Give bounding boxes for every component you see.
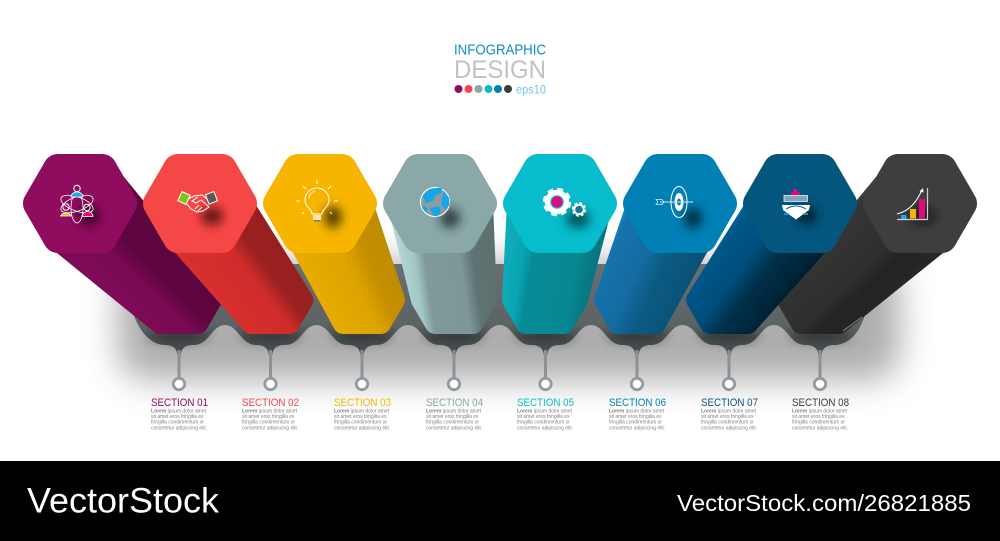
section 1 text: Lorem ipsum dolor amet [151, 408, 206, 414]
section 8 text: SECTION 08 [792, 397, 849, 409]
footer brand: VectorStock [27, 482, 220, 520]
section 4 text: SECTION 04 [426, 397, 483, 409]
title block [454, 42, 546, 96]
section 3 text [334, 397, 391, 432]
section 2 text: fringilla condimentum or [242, 420, 295, 426]
heading: infographic: INFOGRAPHIC [454, 42, 546, 58]
section 6 text: fringilla condimentum or [609, 420, 662, 426]
section 6 text: sit amet eros fringilla ex [609, 414, 662, 420]
section 8 text: Lorem ipsum dolor amet [792, 408, 847, 414]
section 1 text: consetetur adipiscing elit. [151, 426, 207, 432]
eps label: eps10 [516, 82, 546, 96]
icon: ship [782, 189, 810, 220]
icon: handshake [178, 191, 218, 212]
section 1 text: fringilla condimentum or [151, 420, 204, 426]
section 5 text: consetetur adipiscing elit. [517, 426, 573, 432]
section 2 text: sit amet eros fringilla ex [242, 414, 295, 420]
section 8 text: consetetur adipiscing elit. [792, 426, 848, 432]
section 5 text: SECTION 05 [517, 397, 574, 409]
icon: globe [420, 188, 450, 216]
icon: light bulb [296, 180, 338, 222]
section 4 text: consetetur adipiscing elit. [426, 426, 482, 432]
footer bar [0, 461, 1000, 541]
section 2 text: Lorem ipsum dolor amet [242, 408, 297, 414]
prism 2: red [157, 166, 304, 324]
section 8 text: fringilla condimentum or [792, 420, 845, 426]
section 3 text: SECTION 03 [334, 397, 391, 409]
section 2 text: consetetur adipiscing elit. [242, 426, 298, 432]
section 8 text: sit amet eros fringilla ex [792, 414, 845, 420]
section 3 text: Lorem ipsum dolor amet [334, 408, 389, 414]
connector 3 [348, 345, 376, 390]
connector 4 [440, 345, 468, 390]
prism 5: teal [512, 169, 603, 324]
section 5 text: Lorem ipsum dolor amet [517, 408, 572, 414]
section 7 text: fringilla condimentum or [701, 420, 754, 426]
section 6 text: consetetur adipiscing elit. [609, 426, 665, 432]
section 6 text: Lorem ipsum dolor amet [609, 408, 664, 414]
section 1 text: SECTION 01 [151, 397, 208, 409]
section 7 text: SECTION 07 [701, 397, 758, 409]
section 4 text [426, 397, 483, 432]
prism 1: purple [37, 166, 212, 324]
section 4 text: sit amet eros fringilla ex [426, 414, 479, 420]
connector 8 [806, 345, 834, 390]
connectors [165, 345, 834, 390]
heading: design: DESIGN [454, 56, 546, 84]
connector 7 [715, 345, 743, 390]
section 4 text: Lorem ipsum dolor amet [426, 408, 481, 414]
section 2 text [242, 397, 299, 432]
section 1 text [151, 397, 208, 432]
connector 6 [623, 345, 651, 390]
connector 1 [165, 345, 193, 390]
section 2 text: SECTION 02 [242, 397, 299, 409]
icon: target and arrow [656, 186, 693, 218]
section 7 text: sit amet eros fringilla ex [701, 414, 754, 420]
section 7 text: Lorem ipsum dolor amet [701, 408, 756, 414]
prism 7: navy [696, 166, 843, 324]
icon: growth chart [897, 188, 928, 220]
footer image id: VectorStock.com/26821885 [677, 490, 971, 516]
connector 2 [256, 345, 284, 390]
section 7 text [701, 397, 758, 432]
section 5 text: fringilla condimentum or [517, 420, 570, 426]
section 3 text: consetetur adipiscing elit. [334, 426, 390, 432]
section 7 text: consetetur adipiscing elit. [701, 426, 757, 432]
section 8 text [792, 397, 849, 432]
prism 3: yellow [277, 166, 395, 324]
section 5 text: sit amet eros fringilla ex [517, 414, 570, 420]
section 4 text: fringilla condimentum or [426, 420, 479, 426]
section 5 text [517, 397, 574, 432]
contact shadows under prisms [149, 330, 850, 342]
section 1 text: sit amet eros fringilla ex [151, 414, 204, 420]
section 3 text: fringilla condimentum or [334, 420, 387, 426]
section 6 text [609, 397, 666, 432]
prism 8: dark [787, 166, 963, 331]
icon: gears [544, 190, 585, 216]
colour dots [454, 85, 512, 93]
soft ground shadow [118, 262, 900, 380]
section 3 text: sit amet eros fringilla ex [334, 414, 387, 420]
prism 6: blue [604, 166, 723, 324]
connector 5 [532, 345, 560, 390]
scalloped shadow band [130, 264, 868, 345]
section 6 text: SECTION 06 [609, 397, 666, 409]
prism 4: grey [397, 169, 487, 324]
icon: people atom [59, 185, 95, 223]
